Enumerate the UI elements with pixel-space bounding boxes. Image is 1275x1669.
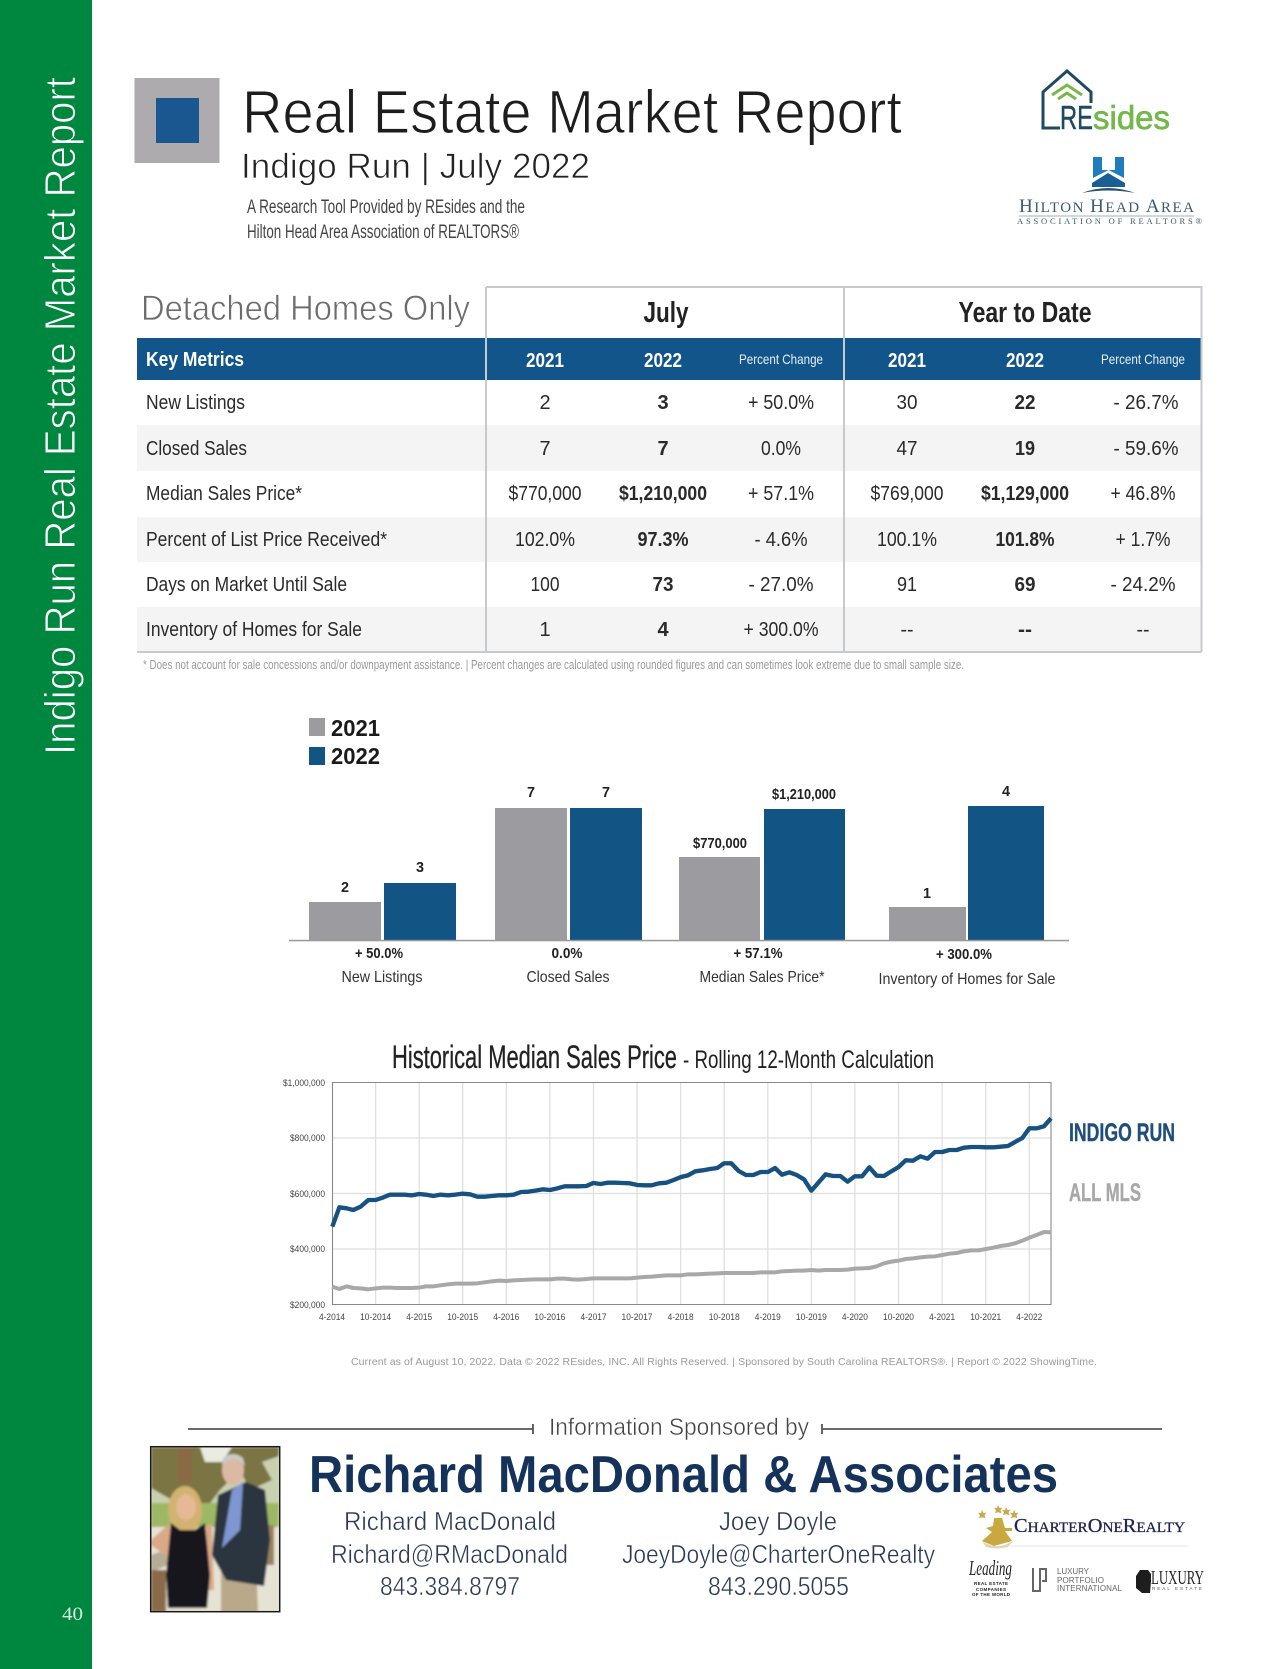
bars: inventory: Inventory of Homes for Sale (878, 971, 1056, 988)
row: median sales price (146, 483, 1176, 505)
x axis labels: 10-2015 (447, 1312, 478, 1323)
photo: agents (150, 1446, 280, 1612)
row: inventory: -- (900, 619, 914, 641)
table group heading: July: July (644, 297, 688, 329)
bars: inventory: 4 (1002, 783, 1011, 800)
row: days on market: Days on Market Until Sale (146, 574, 347, 596)
legend: 2022 (331, 743, 380, 769)
row: percent of list price (146, 529, 1171, 551)
row: closed sales (146, 438, 1179, 460)
bars: closed sales: 0.0% (552, 945, 582, 962)
row: closed sales: 19 (1015, 438, 1035, 460)
line: all MLS (332, 1232, 1051, 1289)
bars: closed sales: 7 (602, 784, 610, 801)
row: closed sales: Closed Sales (146, 438, 247, 460)
logo: Luxury Real Estate: REAL ESTATE (1152, 1586, 1202, 1591)
contact: Richard MacDonald (331, 1506, 568, 1601)
bars: median sales price (679, 786, 845, 986)
row: inventory: 4 (657, 619, 669, 641)
title: Real Estate Market Report (242, 78, 902, 146)
logo: REsides: RE (1060, 99, 1093, 136)
row: percent of list price: 101.8% (996, 529, 1055, 551)
x axis labels: 10-2019 (796, 1312, 827, 1323)
contact: Joey Doyle (622, 1506, 935, 1601)
row: closed sales: - 59.6% (1114, 438, 1179, 460)
sponsor heading: Information Sponsored by (549, 1414, 809, 1441)
table header row (146, 349, 1185, 372)
logo: Leading Real Estate Companies (968, 1556, 1012, 1597)
x axis labels: 10-2016 (534, 1312, 565, 1323)
series label: Indigo Run: INDIGO RUN (1069, 1119, 1175, 1147)
series label: All MLS: ALL MLS (1069, 1179, 1141, 1207)
logo: Luxury Real Estate: LUXURY (1151, 1567, 1204, 1589)
bars: median sales price: Median Sales Price* (700, 969, 824, 986)
contact: Joey Doyle: JoeyDoyle@CharterOneRealty (622, 1539, 935, 1569)
row: inventory: 1 (539, 619, 551, 641)
row: days on market: - 27.0% (748, 574, 814, 596)
logo: Leading Real Estate Companies: COMPANIES (976, 1587, 1006, 1592)
bars: inventory: 1 (923, 885, 931, 902)
line chart (283, 1078, 1051, 1323)
tagline: A Research Tool Provided by REsides and the (247, 197, 525, 218)
row: new listings: New Listings (146, 392, 245, 414)
bars: closed sales: Closed Sales (526, 969, 610, 986)
row: days on market: - 24.2% (1110, 574, 1176, 596)
contact: Richard MacDonald: 843.384.8797 (380, 1571, 520, 1601)
x axis labels: 4-2019 (755, 1312, 781, 1323)
table footnote: * Does not account for sale concessions and/or downpayment assistance. | Percent changes are calculated using rounded figures and can sometimes look extreme due to small sample size. (143, 657, 964, 672)
row: percent of list price: Percent of List Price Received* (146, 529, 387, 551)
x axis labels: 10-2018 (709, 1312, 740, 1323)
row: new listings: 22 (1014, 392, 1036, 414)
legend (309, 715, 380, 769)
bars: inventory: + 300.0% (936, 946, 992, 963)
row: new listings: - 26.7% (1114, 392, 1179, 414)
logo: Luxury Real Estate (1136, 1567, 1204, 1593)
row: closed sales: 47 (896, 438, 918, 460)
table header row: 2021 (526, 350, 564, 372)
sponsor heading (188, 1414, 1162, 1441)
x axis labels: 4-2017 (580, 1312, 606, 1323)
x axis labels: 4-2021 (929, 1312, 955, 1323)
row: median sales price: + 57.1% (748, 483, 814, 505)
table header row: 2022 (1006, 350, 1044, 372)
logo: Luxury Portfolio International: LUXURY (1057, 1567, 1090, 1576)
logo: Leading Real Estate Companies: OF THE WORLD (972, 1592, 1011, 1597)
contact: Richard MacDonald: Richard MacDonald (344, 1506, 556, 1536)
chart title: Historical Median Sales Price (392, 1039, 677, 1075)
row: inventory: + 300.0% (744, 619, 819, 641)
logo: Leading Real Estate Companies: REAL ESTATE (974, 1581, 1008, 1586)
row: inventory: -- (1018, 619, 1032, 641)
contact: Joey Doyle: Joey Doyle (719, 1506, 837, 1536)
row: closed sales: 7 (657, 438, 669, 460)
bars: new listings: 2 (341, 879, 349, 896)
sponsor name: Richard MacDonald & Associates (309, 1446, 1058, 1504)
legend: 2021 (331, 715, 380, 741)
row: percent of list price: 97.3% (638, 529, 689, 551)
row: percent of list price: 100.1% (877, 529, 937, 551)
row: closed sales: 0.0% (761, 438, 801, 460)
row: median sales price: + 46.8% (1110, 483, 1176, 505)
row: days on market: 100 (530, 574, 560, 596)
row: median sales price: $1,210,000 (619, 483, 707, 505)
icon: report square (134, 78, 220, 163)
y axis labels: $200,000 (290, 1300, 325, 1311)
y axis labels (283, 1078, 325, 1311)
bars: closed sales: 7 (527, 784, 535, 801)
row: new listings (146, 392, 1179, 414)
x axis labels: 4-2022 (1016, 1312, 1042, 1323)
line: Indigo Run (332, 1118, 1051, 1227)
bars: median sales price: $1,210,000 (772, 786, 836, 803)
row: inventory (146, 619, 1150, 641)
bars: new listings: + 50.0% (355, 945, 403, 962)
x axis labels: 10-2021 (970, 1312, 1001, 1323)
table group heading: year to date: Year to Date (958, 297, 1092, 329)
sidebar title: Indigo Run Real Estate Market Report (36, 77, 85, 755)
y axis labels: $400,000 (290, 1244, 325, 1255)
x axis labels: 10-2020 (883, 1312, 914, 1323)
heading: detached homes only: Detached Homes Only (141, 289, 470, 328)
row: new listings: 2 (539, 392, 551, 414)
data source note: Current as of August 10, 2022. Data © 2022 REsides, INC. All Rights Reserved. | Sponsored by South Carolina REALTORS®. | Report © 2022 ShowingTime. (351, 1356, 1097, 1368)
row: closed sales: 7 (539, 438, 551, 460)
x axis labels: 4-2016 (493, 1312, 519, 1323)
row: new listings: 30 (896, 392, 918, 414)
table header row: 2021 (888, 350, 926, 372)
x axis labels: 4-2020 (842, 1312, 868, 1323)
bars: closed sales (495, 784, 642, 986)
row: median sales price: $769,000 (870, 483, 944, 505)
chart title: - Rolling 12-Month Calculation (683, 1046, 934, 1074)
row: median sales price: $770,000 (508, 483, 582, 505)
table header row: Percent Change (1101, 351, 1185, 367)
y axis labels: $1,000,000 (283, 1078, 325, 1089)
logo: REsides (1043, 71, 1170, 136)
row: days on market: 69 (1014, 574, 1036, 596)
x axis labels (319, 1312, 1042, 1323)
sidebar (0, 0, 92, 1669)
row: new listings: + 50.0% (748, 392, 814, 414)
row: percent of list price: - 4.6% (754, 529, 808, 551)
row: inventory: -- (1136, 619, 1150, 641)
row: percent of list price: 102.0% (515, 529, 575, 551)
table header row: Percent Change (739, 351, 823, 367)
tagline: Hilton Head Area Association of REALTORS® (247, 222, 519, 243)
bar chart (289, 783, 1069, 988)
page number: 40 (62, 1604, 83, 1625)
row: days on market: 91 (897, 574, 917, 596)
y axis labels: $800,000 (290, 1133, 325, 1144)
logo: Luxury Portfolio International: PORTFOLIO (1057, 1576, 1104, 1585)
bars: new listings (309, 859, 456, 986)
logo: Luxury Portfolio International: INTERNATIONAL (1057, 1584, 1123, 1593)
logo: Leading Real Estate Companies: Leading (968, 1556, 1012, 1580)
bars: new listings: 3 (416, 859, 424, 876)
logo: Hilton Head Area Association of Realtors: HILTON HEAD AREA (1019, 196, 1194, 217)
bars: median sales price: + 57.1% (734, 945, 782, 962)
x axis labels: 10-2017 (622, 1312, 652, 1323)
x axis labels: 10-2014 (360, 1312, 391, 1323)
table header row: 2022 (644, 350, 682, 372)
subtitle: Indigo Run | July 2022 (241, 147, 590, 186)
logo: REsides: sides (1093, 99, 1170, 136)
row: new listings: 3 (657, 392, 669, 414)
logo: Luxury Portfolio International (1032, 1567, 1123, 1593)
bars: inventory (878, 783, 1056, 988)
logo: Charter One Realty: CHARTERONEREALTY (1014, 1515, 1185, 1537)
contact: Richard MacDonald: Richard@RMacDonald (331, 1539, 568, 1569)
row: median sales price: Median Sales Price* (146, 483, 302, 505)
x axis labels: 4-2014 (319, 1312, 345, 1323)
row: median sales price: $1,129,000 (981, 483, 1069, 505)
y axis labels: $600,000 (290, 1189, 325, 1200)
logo: Hilton Head Area Association of Realtors (1017, 157, 1203, 226)
x axis labels: 4-2018 (668, 1312, 694, 1323)
tagline (247, 197, 525, 243)
bars: median sales price: $770,000 (693, 835, 747, 852)
table header row: Key Metrics (146, 349, 244, 371)
logo: Hilton Head Area Association of Realtors: ASSOCIATION OF REALTORS® (1017, 216, 1203, 226)
row: percent of list price: + 1.7% (1116, 529, 1171, 551)
row: days on market (146, 574, 1176, 596)
x axis labels: 4-2015 (406, 1312, 432, 1323)
row: inventory: Inventory of Homes for Sale (146, 619, 362, 641)
contact: Joey Doyle: 843.290.5055 (708, 1571, 849, 1601)
table: key metrics (137, 287, 1202, 652)
bars: new listings: New Listings (342, 969, 422, 986)
logo: Charter One Realty (978, 1505, 1188, 1548)
row: days on market: 73 (652, 574, 674, 596)
